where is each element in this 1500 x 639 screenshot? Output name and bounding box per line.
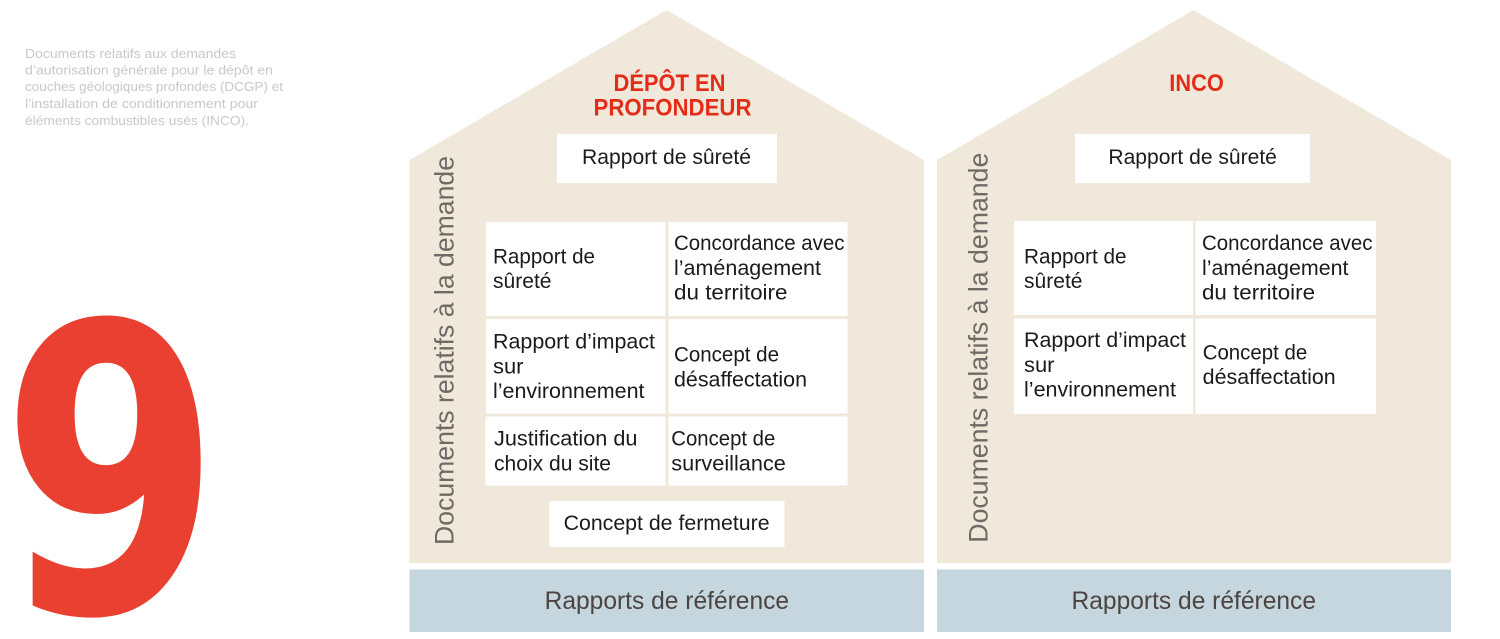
cell: concept de désaffectation: désaffectation <box>674 369 807 392</box>
cell: concept de désaffectation <box>668 319 848 414</box>
cell: rapport de sûreté: Rapport de <box>1024 245 1126 268</box>
intro text block: Documents relatifs aux demandes <box>25 46 237 61</box>
cell: rapport de sûreté: Rapport de <box>493 245 595 268</box>
heading <box>594 69 752 122</box>
cell: justification du choix du site: choix du site <box>494 452 611 475</box>
cell: concept de surveillance <box>668 416 848 486</box>
cell: concept de désaffectation: Concept de <box>1203 341 1307 364</box>
cell: rapport d'impact <box>1014 318 1193 414</box>
box: rapport de sûreté: Rapport de sûreté <box>1108 146 1277 169</box>
cell: rapport d'impact: Rapport d’impact <box>1024 329 1186 352</box>
heading: PROFONDEUR <box>594 95 752 122</box>
house shape <box>410 10 924 563</box>
cell: concordance: du territoire <box>674 282 788 305</box>
cell: rapport d'impact: l’environnement <box>1024 379 1176 402</box>
intro text block: éléments combustibles usés (INCO). <box>25 113 249 128</box>
heading: DÉPÔT EN <box>614 69 726 97</box>
band: rapports de référence (left): Rapports de référence <box>545 587 789 615</box>
band: rapports de référence (left) <box>410 570 924 632</box>
cell: rapport d'impact: sur <box>1024 354 1054 377</box>
cell: concordance: l’aménagement <box>1202 257 1349 280</box>
vertical label: Documents relatifs à la demande <box>964 153 994 543</box>
cell: concordance <box>1196 221 1376 315</box>
intro text block: couches géologiques profondes (DCGP) et <box>25 79 283 94</box>
cell: rapport d'impact: Rapport d’impact <box>493 330 655 353</box>
cell: concept de désaffectation: Concept de <box>674 344 779 367</box>
cell: rapport d'impact: sur <box>493 355 524 378</box>
box: concept de fermeture: Concept de fermeture <box>564 512 770 535</box>
cell: rapport de sûreté <box>1014 221 1193 315</box>
box: rapport de sûreté <box>1075 134 1310 183</box>
intro text block: l’installation de conditionnement pour <box>25 96 259 111</box>
box: rapport de sûreté: Rapport de sûreté <box>582 146 751 169</box>
cell: concept de désaffectation <box>1196 318 1376 414</box>
panel: house INCO <box>937 10 1451 563</box>
cell: rapport d'impact: l’environnement <box>493 380 645 403</box>
cell: concordance: Concordance avec <box>1202 232 1372 255</box>
panel: house Dépôt en profondeur <box>410 10 924 563</box>
cell: concordance <box>668 222 848 316</box>
heading: INCO <box>1169 70 1224 97</box>
cell: concordance: du territoire <box>1202 282 1315 305</box>
band: rapports de référence (right): Rapports de référence <box>1072 587 1316 615</box>
box: rapport de sûreté <box>557 134 777 183</box>
cell: concept de surveillance: surveillance <box>671 452 786 475</box>
cell: rapport de sûreté: sûreté <box>1024 270 1082 293</box>
cell: concordance: l’aménagement <box>674 257 821 280</box>
cell: justification du choix du site: Justification du <box>494 427 638 450</box>
house shape <box>937 10 1451 563</box>
intro text block: d’autorisation générale pour le dépôt en <box>25 62 273 78</box>
cell: rapport de sûreté <box>486 222 666 316</box>
vertical label: Documents relatifs à la demande <box>429 156 459 545</box>
cell: concept de désaffectation: désaffectation <box>1203 366 1336 389</box>
cell: concept de surveillance: Concept de <box>671 427 775 450</box>
band: rapports de référence (right) <box>937 570 1451 632</box>
cell: rapport d'impact <box>486 319 666 414</box>
intro text block <box>25 46 283 128</box>
cell: concordance: Concordance avec <box>674 232 844 255</box>
cell: justification du choix du site <box>486 416 666 486</box>
box: concept de fermeture <box>550 501 784 547</box>
cell: rapport de sûreté: sûreté <box>493 270 552 293</box>
